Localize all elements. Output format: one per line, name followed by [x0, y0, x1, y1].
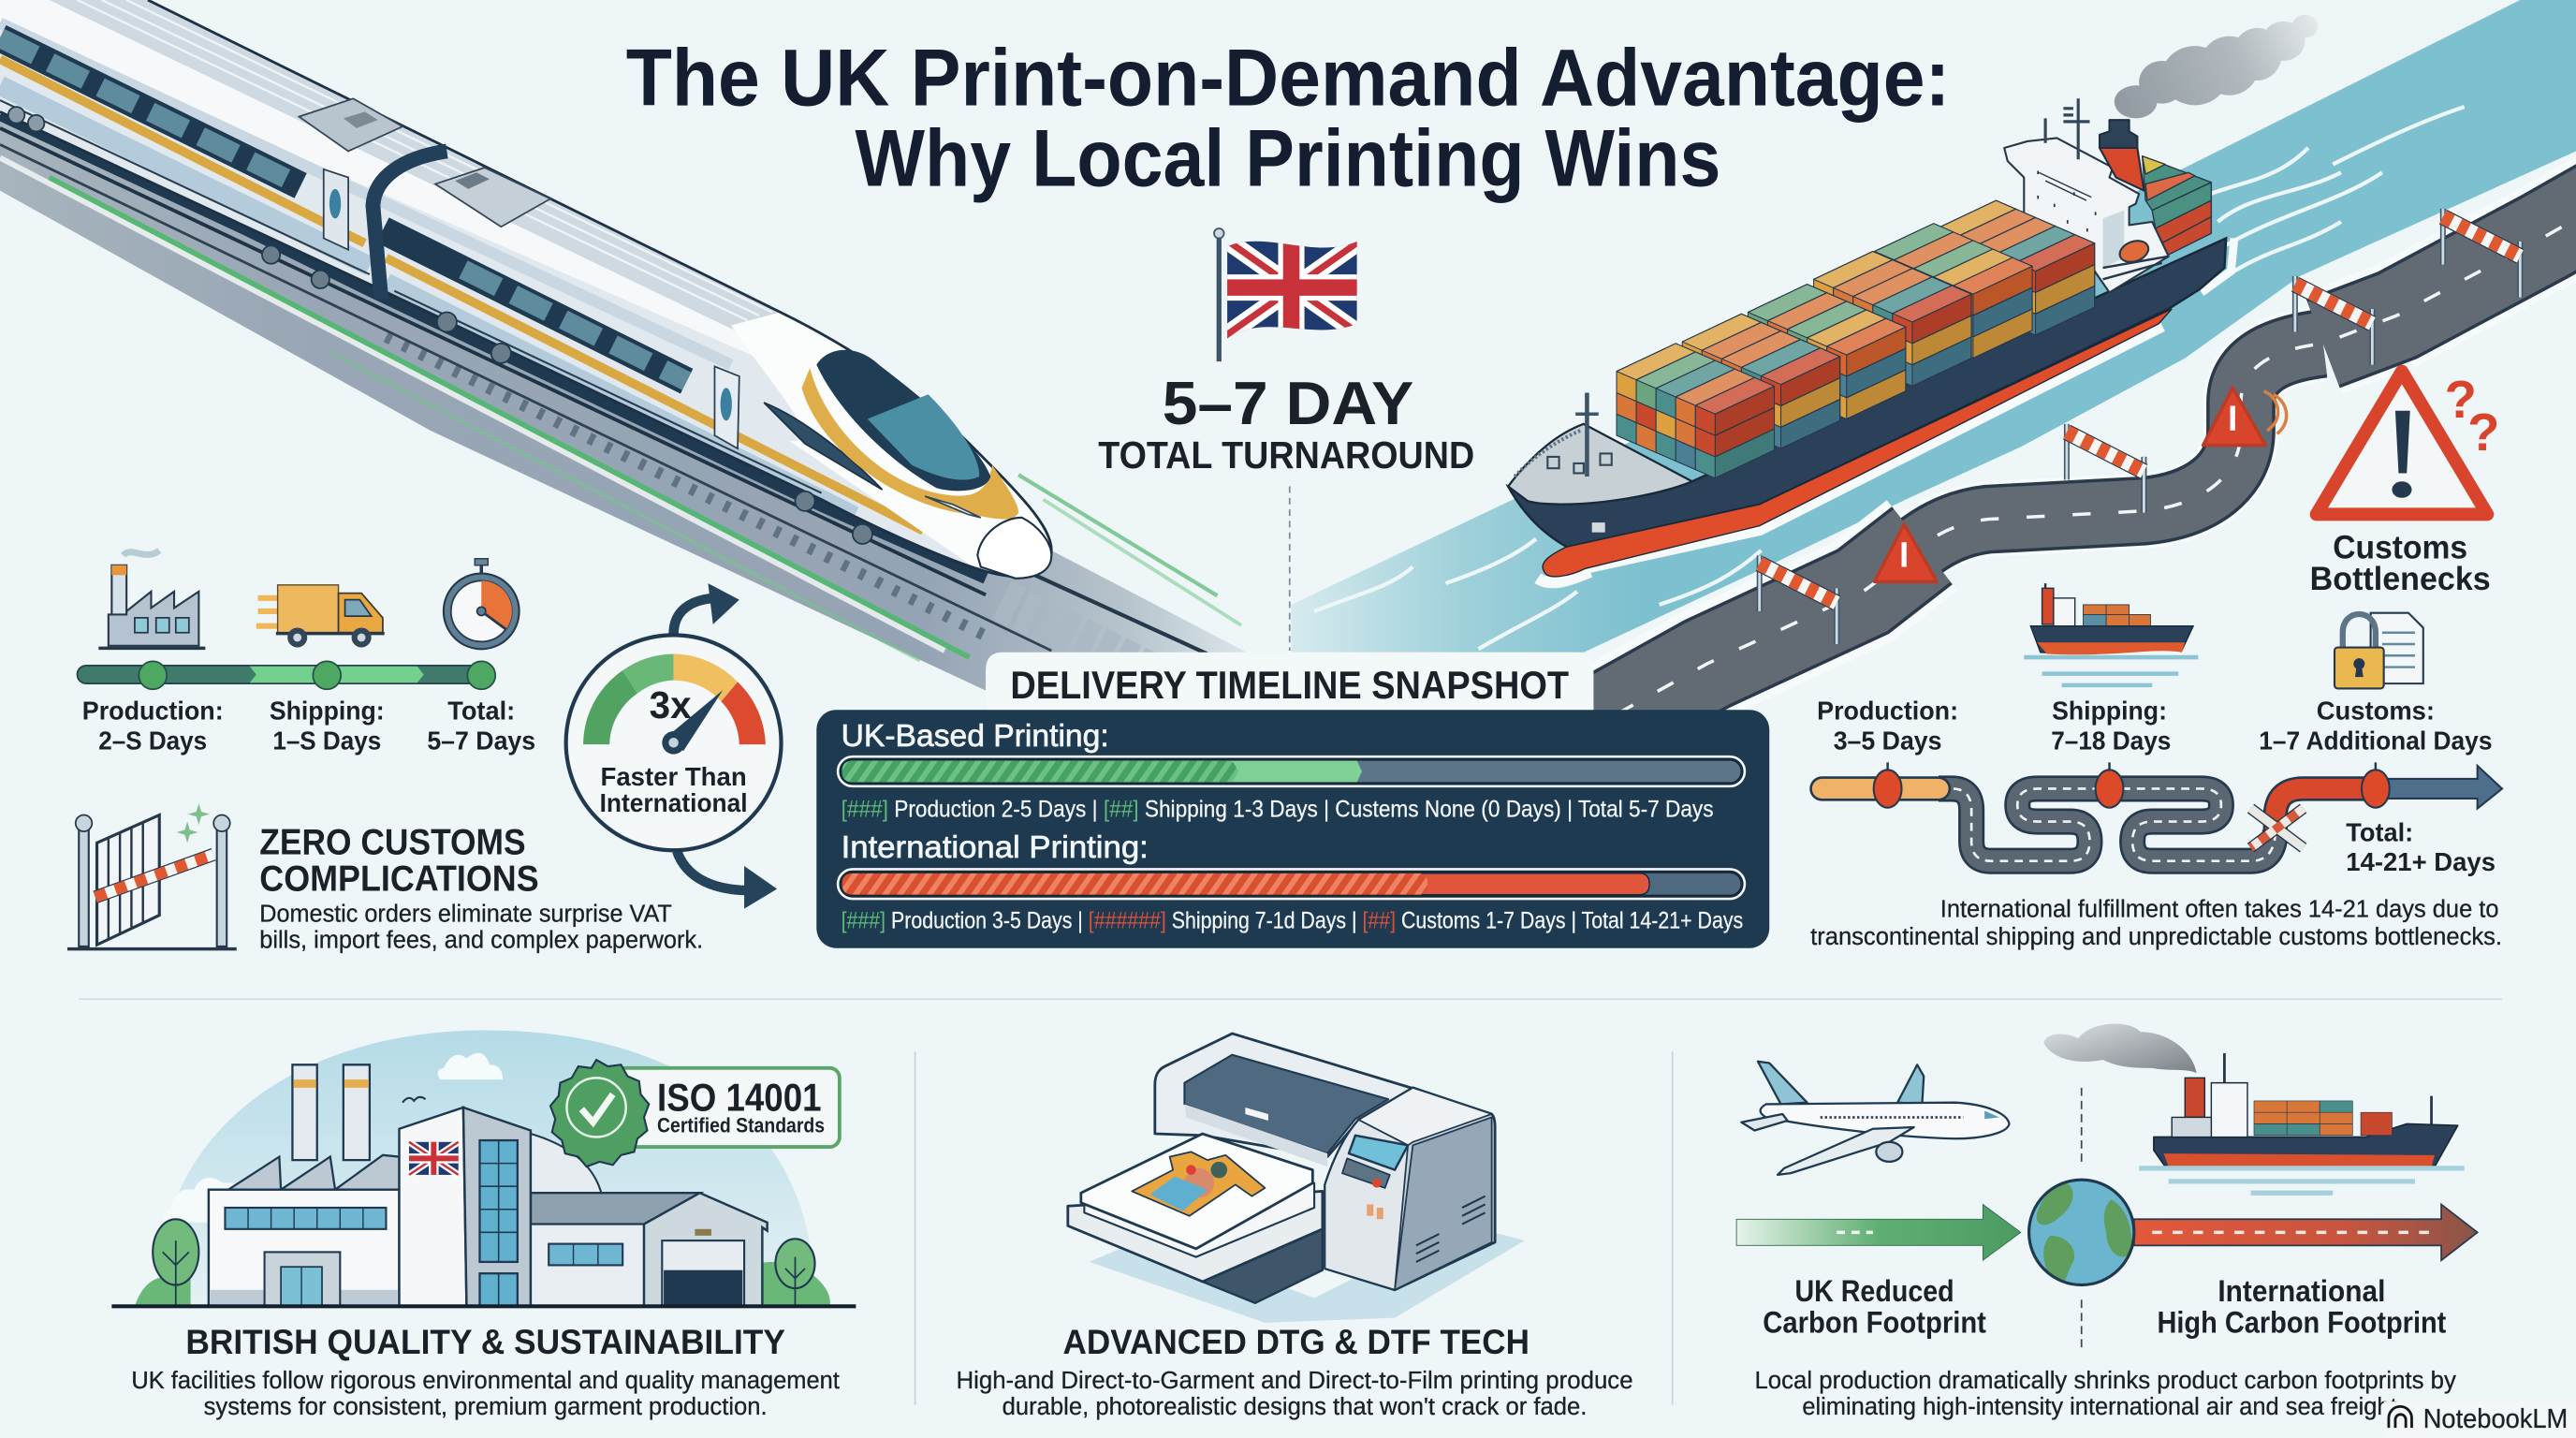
cargo bay 3	[1748, 285, 1906, 419]
gauge dial	[566, 635, 782, 850]
main hall	[209, 1155, 399, 1306]
cargo bay 6	[1937, 200, 2095, 335]
label: UK reduced carbon footprint: UK Reduced	[1794, 1274, 1954, 1308]
label: total: 14-21+ Days	[2346, 847, 2496, 876]
icon: padlock and documents	[2334, 613, 2423, 688]
label: customs: Customs:	[2317, 697, 2435, 726]
illustration: container ship	[1508, 15, 2318, 582]
label: production: 2–S Days	[98, 726, 207, 755]
label: total	[2346, 818, 2496, 876]
label: total: 5–7 Days	[427, 726, 535, 755]
text block: zero customs complications: COMPLICATIONS	[259, 858, 539, 899]
warning sign: road	[1875, 524, 1937, 581]
body text	[956, 1366, 1633, 1420]
body text: durable, photorealistic designs that won't crack or fade.	[1003, 1392, 1587, 1420]
warning sign: road bend	[2203, 388, 2265, 446]
heading: international printing: International Printing:	[842, 830, 1149, 865]
body text: UK facilities follow rigorous environmental and quality management	[131, 1366, 841, 1394]
label: shipping: Shipping:	[270, 697, 385, 726]
label: UK reduced carbon footprint	[1763, 1274, 1986, 1339]
label: production: Production:	[1817, 697, 1958, 726]
illustration: water channel	[1292, 0, 2576, 653]
gauge value: 3x	[650, 683, 692, 726]
label: total: Total:	[447, 697, 515, 726]
body text: High-and Direct-to-Garment and Direct-to-Film printing produce	[956, 1366, 1633, 1394]
international timeline	[1810, 583, 2502, 950]
text block: zero customs complications: bills, import fees, and complex paperwork.	[259, 926, 703, 954]
tower	[399, 1108, 531, 1306]
label: production: Production:	[82, 697, 224, 726]
label: UK reduced carbon footprint: Carbon Footprint	[1763, 1305, 1986, 1339]
icon: crossed barrier	[2250, 809, 2304, 848]
tree left	[153, 1219, 198, 1306]
heading: BRITISH QUALITY & SUSTAINABILITY	[185, 1323, 785, 1361]
icon: delivery truck	[256, 585, 385, 648]
illustration: high-speed train on track	[0, 0, 1281, 710]
winding road path	[1822, 788, 2376, 861]
illustration: garment printer	[1068, 1034, 1525, 1323]
label: shipping: Shipping:	[2052, 697, 2167, 726]
heading: UK-based printing: UK-Based Printing:	[842, 719, 1109, 754]
illustration: factory	[111, 1030, 856, 1306]
gauge caption	[600, 762, 748, 817]
label: international high carbon footprint	[2157, 1274, 2447, 1339]
cargo bay 2	[1682, 314, 1840, 448]
icon: open customs gate	[67, 803, 237, 949]
panel: british quality and sustainability	[111, 1030, 856, 1420]
badge: ISO 14001: Certified Standards	[657, 1113, 825, 1137]
tree right	[775, 1239, 815, 1306]
gauge caption: International	[600, 788, 748, 817]
badge: ISO 14001	[550, 1060, 840, 1167]
stat: 5-7 day total turnaround: 5–7 DAY	[1163, 369, 1413, 437]
title: Why Local Printing Wins	[856, 113, 1720, 203]
text block: international fulfillment: transcontinental shipping and unpredictable customs bottlenecks.	[1810, 922, 2502, 950]
icon: stopwatch	[444, 559, 520, 649]
body text: systems for consistent, premium garment production.	[204, 1392, 768, 1420]
panel tab: delivery timeline snapshot	[986, 653, 1593, 723]
icon: small cargo ship	[2024, 583, 2198, 685]
label: international high carbon footprint: High Carbon Footprint	[2157, 1305, 2447, 1339]
ship superstructure	[2004, 138, 2169, 292]
body text: eliminating high-intensity international air and sea freight.	[1802, 1392, 2404, 1420]
icon: UK flag	[1214, 228, 1364, 361]
icon: globe	[2029, 1180, 2134, 1290]
icon: container ship	[2043, 1024, 2465, 1193]
text block: zero customs complications: Domestic orders eliminate surprise VAT	[259, 900, 672, 928]
label: total	[427, 697, 535, 755]
milestone markers	[1874, 762, 2390, 808]
text block: international fulfillment: International fulfillment often takes 14-21 days due to	[1940, 894, 2499, 922]
smoke	[2115, 15, 2318, 118]
text block: zero customs complications: ZERO CUSTOMS	[259, 823, 526, 863]
label: shipping	[270, 697, 385, 755]
illustration: disrupted road with barricades	[1577, 189, 2576, 736]
logo: NotebookLM: NotebookLM	[2423, 1404, 2568, 1434]
progress bar: UK	[838, 756, 1745, 786]
badge: ISO 14001: ISO 14001	[657, 1075, 822, 1119]
ship funnel	[2100, 120, 2144, 191]
panel: delivery timeline	[816, 710, 1769, 948]
body text: Local production dramatically shrinks product carbon footprints by	[1754, 1366, 2457, 1394]
label: shipping	[2051, 697, 2171, 755]
label: shipping: 1–S Days	[272, 726, 381, 755]
text block: international fulfillment	[1810, 894, 2502, 950]
label: customs	[2259, 697, 2492, 755]
arrow: down	[677, 851, 753, 890]
gauge caption: Faster Than	[600, 762, 747, 791]
title	[626, 33, 1950, 203]
body text	[131, 1366, 841, 1420]
panel tab: delivery timeline snapshot: DELIVERY TIMELINE SNAPSHOT	[1010, 663, 1569, 707]
label: customs: 1–7 Additional Days	[2259, 726, 2492, 755]
label: customs bottlenecks: Customs	[2333, 530, 2467, 566]
legend: international: [###] Production 3-5 Days | [######] Shipping 7-1d Days | [##] Customs 1-7 Days | Total 14-21+ Days	[842, 909, 1743, 934]
arrow: onward	[2376, 766, 2502, 809]
logo: NotebookLM	[2384, 1401, 2576, 1438]
icon: customs warning triangle: ?	[2445, 370, 2477, 429]
barricade 4	[2443, 209, 2520, 298]
label: international high carbon footprint: International	[2217, 1274, 2385, 1308]
panel: carbon footprint comparison	[1736, 1024, 2478, 1420]
heading: ADVANCED DTG & DTF TECH	[1063, 1323, 1530, 1361]
progress bar: international	[838, 869, 1745, 899]
arrow: green, low carbon	[1736, 1204, 2021, 1260]
arrow: up	[674, 598, 714, 634]
body text	[1754, 1366, 2457, 1420]
barricade 3	[2295, 276, 2372, 365]
icon: airplane	[1741, 1062, 2009, 1175]
legend: UK: [###] Production 2-5 Days | [##] Shipping 1-3 Days | Custems None (0 Days) | Total 5-7 Days	[842, 797, 1714, 822]
UK timeline	[77, 550, 535, 755]
aft container stack	[2143, 156, 2211, 257]
stat: 5-7 day total turnaround: TOTAL TURNAROUND	[1098, 433, 1474, 477]
cargo bay 1	[1617, 344, 1775, 478]
label: customs bottlenecks: Bottlenecks	[2310, 561, 2491, 597]
progress track	[77, 661, 495, 689]
dashes on green arrow	[1837, 1231, 1873, 1233]
hull	[1508, 238, 2226, 547]
bow deck	[1508, 424, 1692, 505]
label: customs bottlenecks	[2310, 530, 2491, 597]
title: The UK Print-on-Demand Advantage:	[626, 33, 1950, 123]
barricade 2	[2067, 424, 2144, 513]
cargo bay 5	[1875, 224, 2032, 359]
gauge: 3x faster than international	[566, 583, 782, 909]
panel: advanced DTG and DTF tech	[956, 1034, 1633, 1420]
right wing	[531, 1134, 768, 1306]
cargo bay 4	[1814, 252, 1971, 386]
icon: factory	[98, 550, 205, 648]
label: total: Total:	[2346, 818, 2413, 847]
label: production: 3–5 Days	[1834, 726, 1942, 755]
icon: customs warning triangle	[2317, 370, 2499, 514]
label: production	[1817, 697, 1958, 755]
text block: zero customs complications	[259, 823, 703, 954]
arrow: red, high carbon	[2134, 1204, 2478, 1260]
chimneys	[292, 1064, 370, 1160]
barricade 1	[1760, 555, 1837, 644]
icon: customs warning triangle: ?	[2467, 403, 2499, 462]
label: shipping: 7–18 Days	[2051, 726, 2171, 755]
label: production	[82, 697, 224, 755]
stat: 5-7 day total turnaround	[1098, 369, 1474, 477]
